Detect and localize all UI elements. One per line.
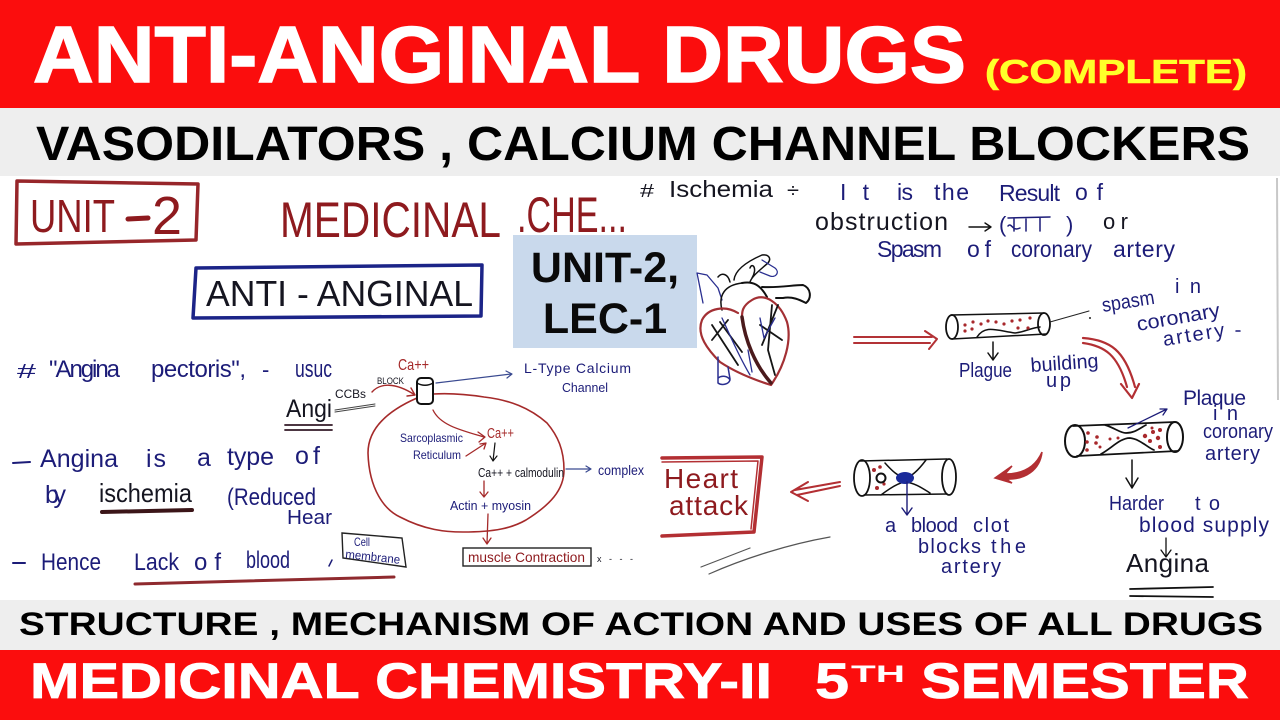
medicinal chemistry heading: .CHE... xyxy=(517,187,627,243)
ischemia definition: ) xyxy=(1066,212,1073,237)
page edge shadow xyxy=(1277,178,1278,400)
plaque label: Plaque xyxy=(1183,387,1246,410)
icon: heart xyxy=(697,255,810,385)
spasm label xyxy=(1100,276,1240,351)
harder to blood supply and angina xyxy=(1109,460,1270,597)
plague building up label xyxy=(959,350,1099,392)
subtitle band xyxy=(0,108,1280,176)
ischemia definition: Result xyxy=(999,180,1061,206)
bottom gray band xyxy=(0,600,1280,650)
cell membrane label xyxy=(342,533,406,567)
blood clot label: artery xyxy=(941,556,1001,578)
arrow: curved red xyxy=(1083,338,1139,398)
spasm label: coronary xyxy=(1135,300,1222,336)
calcium channel mechanism diagram: BLOCK xyxy=(377,376,404,386)
unit 2 box xyxy=(16,181,198,246)
plaque label: in xyxy=(1213,403,1238,425)
ischemia definition: # xyxy=(640,181,654,201)
calcium channel mechanism diagram: Actin + myosin xyxy=(450,498,531,513)
arrow: heart to vessel xyxy=(854,331,937,349)
ischemia definition: of xyxy=(967,236,992,262)
angina notes: blood xyxy=(246,547,290,574)
bottom red banner: SEMESTER xyxy=(921,653,1249,709)
ischemia definition: of xyxy=(1075,179,1104,205)
cell membrane label: membrane xyxy=(345,547,401,567)
complete tag: (COMPLETE) xyxy=(985,53,1247,90)
calcium channel mechanism diagram: Ca++ + calmodulin xyxy=(478,465,564,480)
bottom red banner: TH xyxy=(851,661,905,688)
harder to blood supply and angina: Harder xyxy=(1109,493,1164,515)
l-type channel cylinder xyxy=(417,378,433,404)
ischemia definition: ÷ xyxy=(787,180,799,202)
angina notes: is xyxy=(146,445,166,473)
arrow: clot to heart attack xyxy=(791,482,840,501)
calcium channel mechanism diagram: complex xyxy=(598,462,644,478)
harder to blood supply and angina: Angina xyxy=(1126,548,1210,578)
main title: ANTI-ANGINAL DRUGS xyxy=(33,10,966,99)
calcium channel mechanism diagram: Reticulum xyxy=(413,448,461,462)
subtitle text: VASODILATORS , CALCIUM CHANNEL BLOCKERS xyxy=(36,118,1250,171)
spasm label: spasm xyxy=(1100,287,1156,317)
arrow: red to clot vessel xyxy=(995,452,1042,483)
pencil strokes xyxy=(701,537,830,574)
ischemia definition: artery xyxy=(1113,236,1176,262)
plague building up label: Plague xyxy=(959,360,1012,382)
ischemia definition: ( xyxy=(999,212,1007,237)
angina notes: "Angina xyxy=(49,356,121,383)
vessel with plaque building up xyxy=(946,311,1091,360)
ischemia definition: Spasm xyxy=(877,236,942,262)
angina notes: of xyxy=(194,549,221,576)
angina notes: # xyxy=(17,361,37,383)
unit 2 box: 2 xyxy=(152,186,182,246)
lecture label: LEC-1 xyxy=(543,295,667,343)
ischemia definition: or xyxy=(1103,209,1128,234)
calcium channel mechanism diagram: Ca++ xyxy=(487,425,514,442)
blood clot label xyxy=(885,515,1026,578)
plaque label: artery xyxy=(1205,443,1260,465)
angina notes: pectoris", xyxy=(151,356,246,383)
ischemia definition: is xyxy=(897,179,913,205)
calcium channel mechanism diagram: muscle Contraction xyxy=(468,549,585,565)
angina notes: of xyxy=(295,442,320,470)
blood clot label: clot xyxy=(973,515,1009,537)
calcium channel mechanism diagram: Ca++ xyxy=(398,357,429,374)
blood clot label: blocks xyxy=(918,536,981,558)
angina notes: by xyxy=(45,481,66,509)
angina notes: Angina xyxy=(40,445,118,473)
angina notes: type xyxy=(227,443,274,471)
blood clot label: blood xyxy=(911,515,958,537)
anti-anginal box: ANTI - ANGINAL xyxy=(206,273,473,314)
angina notes: (Reduced xyxy=(227,484,316,511)
blood clot label: the xyxy=(991,536,1026,558)
calcium channel mechanism diagram: L-Type Calcium xyxy=(524,360,631,376)
angina notes: Hence xyxy=(41,549,101,576)
ischemia definition: coronary xyxy=(1011,236,1092,262)
calcium channel mechanism diagram: CCBs xyxy=(335,387,366,401)
angina notes: ischemia xyxy=(99,478,192,508)
angina notes: a xyxy=(197,444,211,472)
calcium channel mechanism diagram: Channel xyxy=(562,380,608,395)
cell outline xyxy=(368,394,564,532)
angina notes: Lack xyxy=(134,549,180,576)
angina notes: Angi xyxy=(286,395,332,423)
bottom red banner: 5 xyxy=(815,653,849,709)
ischemia definition: obstruction xyxy=(815,208,948,236)
calcium channel mechanism diagram: x - - - xyxy=(597,554,633,564)
angina notes: Hear xyxy=(287,507,332,529)
bottom red banner xyxy=(0,650,1280,720)
angina notes xyxy=(13,356,394,584)
bottom caption: STRUCTURE , MECHANISM OF ACTION AND USES OF ALL DRUGS xyxy=(19,606,1263,642)
heart attack box: attack xyxy=(669,490,749,521)
ischemia definition: It xyxy=(840,179,870,205)
harder to blood supply and angina: to xyxy=(1195,493,1220,515)
plague building up label: building xyxy=(1030,350,1099,377)
ischemia definition: the xyxy=(934,179,969,205)
top red banner xyxy=(0,0,1280,108)
heart attack box xyxy=(662,457,762,536)
angina notes: usuc xyxy=(295,356,332,383)
cell membrane label: Cell xyxy=(354,535,370,549)
angina notes: - xyxy=(262,357,269,382)
ischemia definition: Ischemia xyxy=(669,176,773,202)
heart attack box: Heart xyxy=(664,463,738,494)
ischemia definition xyxy=(640,176,1176,262)
course text: MEDICINAL CHEMISTRY-II xyxy=(30,653,772,709)
lecture label xyxy=(513,235,697,348)
harder to blood supply and angina: blood supply xyxy=(1139,514,1270,537)
vessel with blood clot xyxy=(854,459,956,515)
lecture label: UNIT-2, xyxy=(531,244,679,292)
narrowed vessel with plaque xyxy=(1065,409,1183,457)
medicinal chemistry heading: MEDICINAL xyxy=(280,192,501,248)
plaque label: coronary xyxy=(1203,421,1273,443)
spasm label: artery xyxy=(1161,320,1226,351)
calcium channel mechanism diagram: Sarcoplasmic xyxy=(400,431,463,445)
calcium channel mechanism diagram xyxy=(335,357,644,566)
spasm label: in xyxy=(1175,276,1201,298)
plague building up label: up xyxy=(1046,370,1071,392)
unit 2 box: UNIT xyxy=(30,190,115,242)
blood clot label: a xyxy=(885,515,897,537)
plaque label xyxy=(1183,387,1273,465)
